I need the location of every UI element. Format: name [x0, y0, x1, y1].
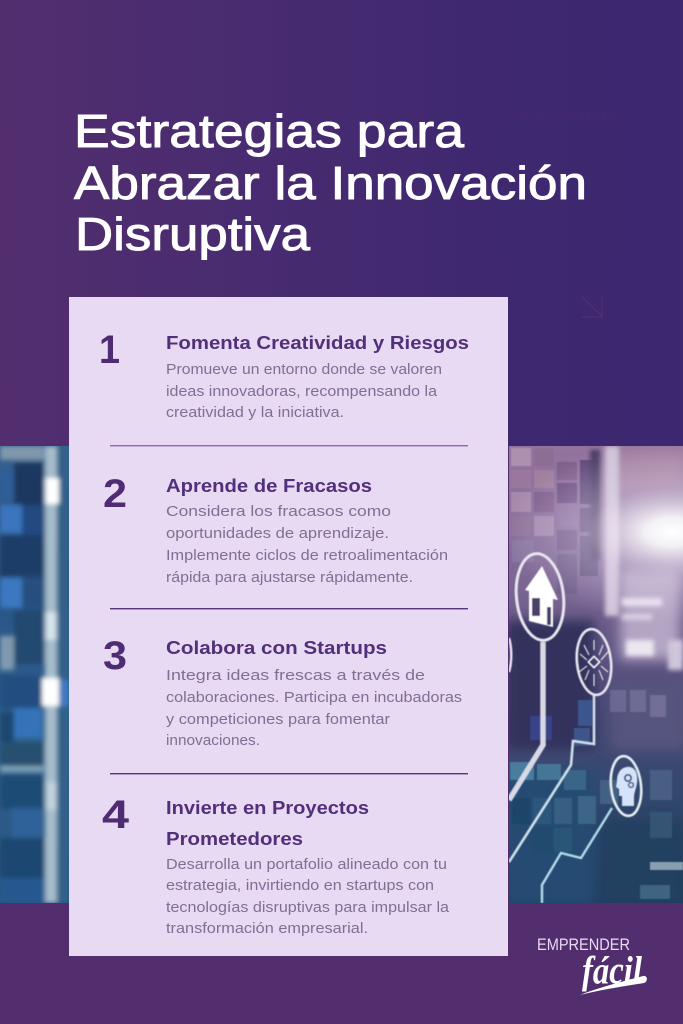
step 3: Integra ideas frescas a través de [166, 668, 425, 684]
icon: faint arrow [582, 297, 602, 317]
title: Abrazar la Innovación [74, 157, 587, 209]
step 1: 1 [99, 328, 120, 372]
step 3: Colabora con Startups [166, 637, 387, 658]
icon: chip ring [509, 627, 614, 862]
step 2: Implemente ciclos de retroalimentación [166, 548, 448, 564]
step 4: tecnologías disruptivas para impulsar la [166, 900, 450, 916]
icon: head with gears ring [542, 755, 644, 903]
title: Estrategias para [74, 105, 464, 157]
panel: strategies card [69, 297, 508, 956]
step 2: 2 [103, 472, 127, 516]
step 4: Invierte en Proyectos [166, 797, 369, 818]
logo: Emprender Fácil: EMPRENDER [537, 936, 630, 954]
step 1: Fomenta Creatividad y Riesgos [166, 332, 469, 353]
step 4 [102, 793, 450, 937]
step 2: Considera los fracasos como [166, 504, 391, 520]
left photo: blue data wall [0, 446, 69, 903]
step 3: colaboraciones. Participa en incubadoras [166, 690, 462, 706]
title: Disruptiva [75, 208, 310, 260]
faint handle text: @reallygreatsite [498, 108, 615, 123]
step 2: oportunidades de aprendizaje. [166, 526, 389, 542]
step 4: 4 [102, 793, 130, 837]
step 3: 3 [103, 634, 127, 678]
step 3: y competiciones para fomentar [166, 712, 390, 728]
icon: house ring [509, 551, 568, 800]
step 1: creatividad y la iniciativa. [166, 405, 344, 421]
step 4: transformación empresarial. [166, 921, 368, 937]
soft photo areas [505, 450, 683, 905]
logo: Emprender Fácil: fácil [582, 948, 643, 992]
step 4: Desarrolla un portafolio alineado con tu [166, 857, 447, 873]
title [74, 105, 587, 260]
step 3 [103, 634, 462, 749]
circuit lines and icon rings [509, 551, 644, 903]
step 1 [99, 328, 469, 421]
step 4: estrategia, invirtiendo en startups con [166, 878, 434, 894]
step 3: innovaciones. [166, 733, 260, 749]
step 2: rápida para ajustarse rápidamente. [166, 570, 413, 586]
step 1: Promueve un entorno donde se valoren [166, 362, 442, 378]
photo grid squares [510, 448, 683, 899]
step 2: Aprende de Fracasos [166, 475, 372, 496]
step 1: ideas innovadoras, recompensando la [166, 384, 438, 400]
logo: Emprender Fácil [537, 936, 647, 995]
step 2 [103, 472, 448, 586]
step 4: Prometedores [166, 828, 303, 849]
right photo: digital icons over data wall [502, 442, 683, 905]
